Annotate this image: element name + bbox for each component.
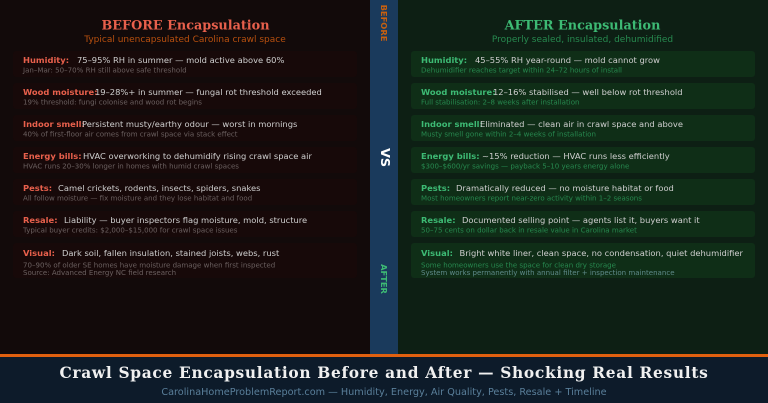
center divider [370,0,398,354]
before vertical label: BEFORE [379,5,389,42]
row: energy bills after [411,147,755,173]
row: humidity after: Humidity: [421,55,467,65]
row: indoor smell after [411,115,755,141]
row: resale before [13,211,357,237]
row: humidity after: 45–55% RH year-round — mold cannot grow [475,55,660,65]
row: resale after: 50–75 cents on dollar back in resale value in Carolina market [421,226,637,234]
row: wood moisture before: 19–28%+ in summer — fungal rot threshold exceeded [95,87,322,97]
row: energy bills before [13,147,357,173]
row: visual before: Dark soil, fallen insulation, stained joists, webs, rust [62,248,280,258]
row: visual after: System works permanently with annual filter + inspection maintenance [421,268,675,277]
row: visual before: Source: Advanced Energy NC field research [23,268,176,277]
row: wood moisture before: 19% threshold: fungi colonise and wood rot begins [23,98,202,106]
footer subtitle: CarolinaHomeProblemReport.com — Humidity, Energy, Air Quality, Pests, Resale + Timeline [161,387,607,398]
row: visual after: Visual: [421,248,453,258]
row: pests before [13,179,357,205]
row: indoor smell after: Indoor smell: [421,119,483,129]
row: humidity before: Jan–Mar: 50–70% RH still above safe threshold [22,66,187,74]
row: wood moisture before: Wood moisture: [23,87,98,97]
row: energy bills after: ~15% reduction — HVAC runs less efficiently [482,151,670,161]
row: resale after: Documented selling point — agents list it, buyers want it [462,215,700,225]
row: resale before: Typical buyer credits: $2,000–$15,000 for crawl space issues [22,226,238,234]
row: indoor smell before: Persistent musty/earthy odour — worst in mornings [82,119,297,129]
panel: after [398,0,768,354]
after vertical label: AFTER [379,264,389,295]
row: wood moisture before [13,83,357,109]
row: pests after: Dramatically reduced — no moisture habitat or food [456,183,674,193]
footer title: Crawl Space Encapsulation Before and After — Shocking Real Results [59,364,709,382]
row: resale before: Liability — buyer inspectors flag moisture, mold, structure [64,215,307,225]
row: resale after: Resale: [421,215,456,225]
row: wood moisture after: 12–16% stabilised — well below rot threshold [493,87,683,97]
before heading: BEFORE Encapsulation [101,18,270,34]
row: humidity before [13,51,357,77]
vs label: VS [377,148,392,167]
footer [0,354,768,403]
row: pests after: Pests: [421,183,450,193]
row: wood moisture after: Wood moisture: [421,87,496,97]
row: wood moisture after: Full stabilisation: 2–8 weeks after installation [421,98,579,106]
after heading: AFTER Encapsulation [504,18,661,34]
row: visual before: 70–90% of older SE homes have moisture damage when first inspected [23,260,275,270]
row: indoor smell after: Eliminated — clean air in crawl space and above [480,119,683,129]
row: humidity after [411,51,755,77]
row: pests before: Pests: [23,183,52,193]
row: pests before: All follow moisture — fix moisture and they lose habitat and food [23,194,252,202]
row: energy bills after: Energy bills: [421,151,480,161]
row: pests after [411,179,755,205]
row: visual before [13,243,357,278]
row: humidity after: Dehumidifier reaches target within 24–72 hours of install [421,66,622,74]
row: humidity before: 75–95% RH in summer — mold active above 60% [77,55,284,65]
row: pests before: Camel crickets, rodents, insects, spiders, snakes [58,183,261,193]
row: indoor smell before [13,115,357,141]
after subtitle: Properly sealed, insulated, dehumidified [492,35,673,45]
row: resale before: Resale: [23,215,58,225]
row: humidity before: Humidity: [23,55,69,65]
row: energy bills before: HVAC runs 20–30% longer in homes with humid crawl spaces [23,162,239,170]
row: visual after: Some homeowners use the space for clean dry storage [421,260,616,270]
panel: before [0,0,370,354]
row: indoor smell after: Musty smell gone within 2–4 weeks of installation [421,130,596,138]
row: visual before: Visual: [23,248,55,258]
row: visual after [411,243,755,278]
row: resale after [411,211,755,237]
before subtitle: Typical unencapsulated Carolina crawl space [83,35,286,45]
row: indoor smell before: 40% of first-floor air comes from crawl space via stack effect [23,130,238,138]
row: energy bills before: HVAC overworking to dehumidify rising crawl space air [83,151,312,161]
row: wood moisture after [411,83,755,109]
row: energy bills after: $300–$600/yr savings — payback 5–10 years energy alone [421,162,629,170]
row: energy bills before: Energy bills: [23,151,82,161]
row: visual after: Bright white liner, clean space, no condensation, quiet dehumidifier [460,248,744,258]
row: pests after: Most homeowners report near-zero activity within 1–2 seasons [421,194,642,202]
row: indoor smell before: Indoor smell: [23,119,85,129]
